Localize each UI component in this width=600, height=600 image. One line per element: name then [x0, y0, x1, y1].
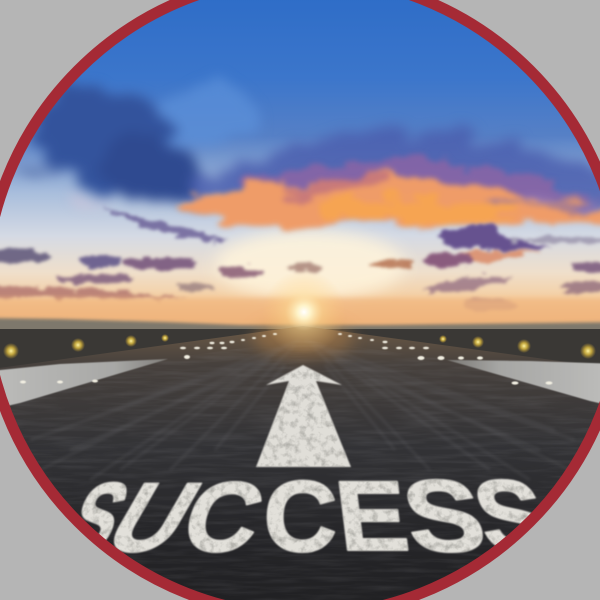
SUCCESS lettering on the runway: C	[172, 461, 275, 572]
white arrow marking	[256, 365, 351, 467]
glow on the runway at the horizon	[253, 318, 353, 358]
horizon tree line	[0, 316, 600, 329]
sky gradient	[0, 0, 600, 330]
high blue clouds	[13, 70, 600, 214]
warm horizon haze	[0, 296, 600, 314]
pale glow above horizon	[215, 230, 405, 300]
runway streak texture	[0, 340, 600, 600]
yellow runway lamps	[3, 334, 596, 359]
right painted shoulder	[447, 360, 600, 408]
SUCCESS lettering on the runway: C	[263, 460, 338, 573]
SUCCESS lettering on the runway	[80, 478, 537, 554]
SUCCESS lettering on the runway: U	[87, 463, 218, 573]
left painted shoulder	[0, 359, 168, 410]
airfield ground	[0, 329, 600, 368]
sun	[269, 275, 339, 350]
runway surface	[0, 326, 600, 600]
low purple clouds	[0, 210, 600, 312]
white runway lights	[20, 333, 552, 385]
SUCCESS lettering on the runway: S	[48, 464, 145, 573]
orange sunset cloud	[175, 157, 600, 226]
motion streaks on the runway	[86, 352, 554, 479]
runway centre line dashes	[302, 328, 304, 362]
SUCCESS lettering on the runway: S	[462, 460, 562, 574]
SUCCESS lettering on the runway: S	[394, 460, 495, 573]
SUCCESS lettering on the runway: E	[330, 460, 414, 571]
